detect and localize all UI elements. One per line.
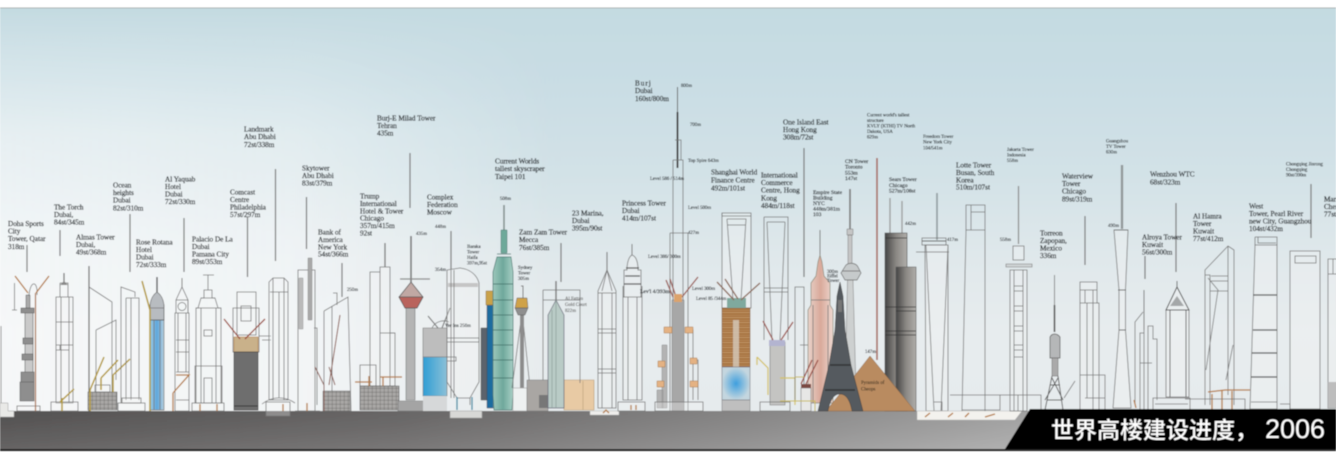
label: Landmark Abu Dhabi: 72st/338m — [244, 141, 275, 149]
tower: 23 Marina — [590, 252, 619, 415]
tower: International Commerce Centre — [757, 217, 795, 411]
label: Shanghai World Finance Centre: 492m/101st — [711, 184, 745, 192]
label: Bank of America: America — [318, 236, 344, 244]
tower: Sears Tower — [885, 198, 916, 411]
tower: Bank of America — [315, 293, 351, 411]
label: Burj-E Milad Tower: Burj-E Milad Tower — [377, 114, 436, 122]
tower: The Torch — [51, 273, 78, 411]
tower: Chongqing Jinrong — [1280, 251, 1320, 409]
label: KVLY TV mast: structure — [867, 119, 884, 124]
tower: Jakarta Tower — [1000, 186, 1041, 411]
label: Wenzhou WTC: 68st/323m — [1150, 178, 1181, 186]
label: One Island East: One Island East — [783, 118, 829, 126]
label: Burj-E Milad Tower: 435m — [377, 130, 394, 138]
label: Torreon: 336m — [1040, 252, 1057, 260]
label: Empire State Building: NYC — [813, 201, 825, 207]
label: Ocean Heights: Dubai — [113, 197, 131, 205]
label: Paris height note: 300m — [827, 270, 838, 275]
tower: Burj Dubai — [655, 87, 703, 411]
label: Rose Rotana Hotel: Dubai — [136, 254, 154, 262]
label: Comcast Centre: Philadelphia — [230, 204, 267, 212]
tower: Princess Tower — [618, 244, 645, 411]
tower: Skytower — [295, 258, 320, 411]
label: The Torch: 84st/345m — [54, 219, 85, 227]
tower: West Tower — [1250, 237, 1277, 409]
label: Rose Rotana Hotel: Rose Rotana — [136, 238, 173, 246]
label: CN Tower: CN Tower — [845, 159, 868, 165]
tower: Pyramid of Cheops — [826, 356, 915, 411]
label: The Torch: The Torch — [54, 204, 84, 212]
label: Zam Zam Tower: 76st/385m — [519, 244, 550, 252]
label: Trump International Hotel and Tower: 357m/415m — [360, 222, 395, 230]
label: 448m height: 448m — [435, 225, 446, 230]
label: Lotte Tower: Lotte Tower — [956, 162, 992, 170]
tower: Trump International — [355, 243, 402, 410]
label: Comcast Centre: 57st/297m — [230, 211, 261, 219]
label: Ocean Heights: heights — [113, 189, 134, 197]
label: Burj heights: Level 500m — [688, 206, 711, 211]
label: Sears Tower: Chicago — [889, 183, 908, 189]
tower: Al Yaquab — [173, 278, 189, 411]
label: Doha Sports City Tower: 318m — [8, 243, 25, 251]
label: Taipei 101: tallest skyscraper — [495, 165, 545, 173]
label: Burj heights: 427m — [688, 231, 699, 236]
label: Burj heights: Top Spire 643m — [688, 159, 719, 164]
label: Level 85 notation: Level 85 /344m — [696, 297, 727, 302]
label: Sydney Tower: Tower — [518, 272, 531, 276]
label: Doha Sports City Tower: Tower, Qatar — [8, 235, 46, 243]
label: One Island East: Hong Kong — [783, 126, 817, 134]
label: Sears Tower: 527m/108st — [889, 189, 916, 195]
label: Freedom Tower: 104/541m — [923, 146, 943, 151]
label: Comcast Centre: Centre — [230, 196, 249, 204]
label: Torreon: Mexico — [1040, 244, 1062, 252]
label: Almas Tower: Dubai, — [76, 241, 96, 249]
label: KVLY TV mast: Current world's tallest — [867, 114, 910, 118]
label: Trump International Hotel and Tower: International — [360, 200, 397, 208]
tower: Doha Sports City — [12, 276, 49, 411]
label: Wenzhou WTC: Wenzhou WTC — [1150, 170, 1195, 178]
label: Burj heights: Level 300m — [692, 287, 715, 292]
label: 23 Marina: 395m/90st — [572, 224, 602, 232]
tower: CN Tower — [841, 189, 861, 390]
label: Al Hamra Tower: Kuwait — [1193, 228, 1214, 236]
label: Palacio De La Dubai: Palacio De La — [192, 236, 234, 244]
label: Burj heights: Level 586 / 514m — [650, 177, 684, 182]
tower: Ocean Heights — [118, 287, 145, 411]
label: 23 Marina: 23 Marina, — [572, 210, 604, 218]
label: Skytower: Skytower — [302, 164, 330, 172]
label: International Commerce Centre: Centre, Hong — [761, 187, 800, 195]
label: Al Fattan Gold Court: 822m — [565, 309, 576, 314]
tower: Sydney Tower — [512, 286, 530, 411]
label: Princess Tower: 414m/107st — [622, 214, 656, 222]
label: Rose Rotana Hotel: 72st/333m — [136, 261, 167, 269]
label: West Tower: new City, Guangzhou — [1249, 218, 1312, 226]
label: Almas Tower: Almas Tower — [76, 234, 115, 242]
label: Almas Tower: 49st/368m — [76, 249, 107, 257]
label: Al Yaquab Hotel: 72st/330m — [165, 198, 196, 206]
label: Skytower: 83st/379m — [302, 180, 333, 188]
label: KVLY TV mast: 629m — [867, 136, 878, 140]
tower: Rose Rotana — [142, 277, 164, 411]
label: Trump International Hotel and Tower: Hotel & Tower — [360, 207, 404, 215]
label: Empire State Building: Building — [813, 196, 833, 202]
label: Level 4 notation: Lev'l 4/393m — [640, 289, 670, 295]
label: Lotte Tower: Busan, South — [956, 169, 995, 177]
label: Pyramids of Cheops: Cheops — [861, 388, 876, 392]
label: Complex Federation Moscow: Federation — [427, 201, 458, 209]
label: 442m height: 442m — [905, 222, 916, 227]
label: Sears Tower: Sears Tower — [889, 177, 917, 183]
label: Chongqing Jinrong: Chongqing Jinrong — [1286, 162, 1324, 168]
label: Sydney Tower: Sydney — [518, 266, 533, 271]
tower: Shanghai World Finance Centre — [717, 213, 760, 411]
label: Burj Dubai: Burj — [635, 80, 652, 88]
label: Baraka Tower: Tower — [467, 250, 480, 256]
label: Comcast Centre: Comcast — [230, 188, 255, 196]
title banner — [1005, 409, 1336, 449]
label: Landmark Abu Dhabi: Abu Dhabi — [244, 133, 276, 141]
tower: Federation Complex — [423, 231, 482, 418]
label: Alroya Tower: Alroya Tower — [1142, 234, 1182, 242]
label: International Commerce Centre: 484m/118st — [761, 202, 795, 210]
tower: Comcast Centre — [224, 292, 271, 410]
tower: Freedom Tower — [916, 193, 949, 411]
label: Bank of America: 54st/366m — [318, 251, 349, 259]
label: Trump International Hotel and Tower: 92st — [360, 230, 372, 238]
label: Guangzhou TV Tower: TV Tower — [1106, 145, 1126, 150]
label: Al Yaquab Hotel: Hotel — [165, 183, 181, 191]
label: West Tower: 104st/432m — [1249, 225, 1283, 233]
label: Bank of America: Bank of — [318, 228, 342, 236]
label: Skytower: Abu Dhabi — [302, 172, 334, 180]
label: 435m height: 435m — [416, 232, 427, 237]
label: The Torch: Dubai, — [54, 211, 74, 219]
label: Trump International Hotel and Tower: Trump — [360, 192, 380, 200]
label: Ocean Heights: Ocean — [113, 182, 132, 190]
label: Jakarta Tower: Indonesia — [1007, 154, 1027, 158]
label: Taipei 101: Current Worlds — [495, 158, 539, 166]
label: Baraka Tower: Baraka — [467, 245, 481, 250]
label: Paris height note: Eiffel — [827, 274, 838, 280]
label: CN Tower: 553m — [845, 170, 858, 176]
label: Chongqing Jinrong: 90st/390m — [1286, 174, 1307, 178]
label: Zam Zam Tower: Zam Zam Tower — [519, 228, 568, 236]
label: Shanghai World Finance Centre: Finance Centre — [711, 176, 755, 184]
label: Al Fattan Gold Court: Al Fattan — [565, 297, 584, 302]
label: Al Fattan Gold Court: Gold Court — [565, 303, 587, 308]
label: 558m height: 558m — [1000, 238, 1011, 243]
label: Burj heights: 800m — [681, 84, 692, 89]
label: Baraka Tower: Haifa — [467, 256, 479, 261]
label: Waterview Tower: Waterview — [1062, 172, 1094, 180]
base plaza: right white strip — [917, 411, 1022, 420]
tower: Almas — [88, 266, 130, 411]
tower: Milad Tower — [398, 236, 430, 411]
label: Bank of America: New York — [318, 243, 348, 251]
tower: right edge clipped — [1328, 259, 1336, 408]
label: Waterview Tower: 89st/319m — [1062, 195, 1093, 203]
label: Lotte Tower: Korea — [956, 176, 974, 184]
label: Palacio De La Dubai: Dubai — [192, 243, 210, 251]
label: CN Tower: Toronto — [845, 165, 863, 171]
leader lines — [27, 148, 1311, 297]
label: 508m height: 508m — [500, 197, 511, 202]
label: Burj Dubai: 160st/800m — [635, 95, 669, 103]
label: Torreon: Torreon — [1040, 230, 1063, 238]
label: Guangzhou TV Tower: 630m — [1106, 150, 1117, 156]
label: Alroya Tower: Kuwait — [1142, 241, 1163, 249]
label: Princess Tower: Dubai — [622, 207, 640, 215]
label: Al Yaquab Hotel: Al Yaquab — [165, 176, 196, 184]
label: Pyramids of Cheops: Pyramids of — [861, 381, 885, 386]
tower: low building and red cranes — [780, 360, 818, 411]
ground strip — [0, 411, 1336, 451]
tower: Landmark Abu Dhabi — [262, 278, 295, 416]
tower: One Island East — [795, 287, 810, 400]
label: Doha Sports City Tower: City — [8, 228, 21, 236]
label: Al Hamra Tower: Tower — [1193, 220, 1212, 228]
label: Trump International Hotel and Tower: Chicago — [360, 215, 384, 223]
label: Torreon: Zapopan, — [1040, 237, 1067, 245]
label: 23 Marina: Dubai — [572, 217, 590, 225]
label: Empire State Building: 448m/381m — [813, 206, 841, 212]
label: International Commerce Centre: International — [761, 172, 798, 180]
label: Paris height note: Tower — [827, 279, 840, 284]
tower: Al Hamra — [1185, 246, 1250, 411]
title: 世界高楼建设进度， — [1051, 417, 1258, 443]
label: Shanghai World Finance Centre: Shanghai World — [711, 168, 758, 176]
label: Alroya Tower: 56st/300m — [1142, 248, 1173, 256]
label: Empire State Building: Empire State — [813, 190, 843, 196]
tower: Alroya Tower — [1134, 290, 1157, 411]
tower: Waterview — [1080, 282, 1105, 411]
tower: Empire State Building — [808, 230, 833, 403]
label: International Commerce Centre: Commerce — [761, 179, 793, 187]
label: Landmark Abu Dhabi: Landmark — [244, 126, 274, 134]
label: Burj-E Milad Tower: Tehran — [377, 122, 397, 130]
tower: Lotte Tower — [950, 205, 1000, 411]
label: Doha Sports City Tower: Doha Sports — [8, 220, 44, 228]
label: 417m height: 417m — [947, 238, 958, 243]
label: West Tower: Tower, Pearl River — [1249, 210, 1304, 218]
label: Taipei 101: Taipei 101 — [495, 173, 526, 181]
label: Palacio De La Dubai: 89st/353m — [192, 258, 223, 266]
label: Freedom Tower: Freedom Tower — [923, 135, 954, 140]
label: Empire State Building: 103 — [813, 212, 822, 218]
tower: Palacio De La Dubai — [192, 275, 224, 411]
label: Princess Tower: Princess Tower — [622, 200, 666, 208]
tower: Dark blue neighbour — [481, 291, 503, 408]
tower: KVLY TV mast — [876, 158, 878, 360]
label: Federation lower height: Ver Ins 256m — [445, 324, 471, 329]
label: Complex Federation Moscow: Complex — [427, 194, 454, 202]
label: Palacio De La Dubai: Pamana City — [192, 250, 229, 258]
tower: left edge fragment — [0, 326, 14, 417]
label: Waterview Tower: Chicago — [1062, 188, 1086, 196]
label: Baraka Tower: 397m,95st — [467, 262, 488, 266]
label: Zam Zam Tower: Mecca — [519, 236, 539, 244]
label: 250m height: 250m — [347, 288, 358, 293]
label: International Commerce Centre: Kong — [761, 194, 777, 202]
label: KVLY TV mast: Dakota, USA — [867, 130, 893, 135]
label: Al Yaquab Hotel: Dubai — [165, 190, 183, 198]
label: Ocean Heights: 82st/310m — [113, 204, 144, 212]
label: Jakarta Tower: Jakarta Tower — [1007, 148, 1034, 153]
label: Waterview Tower: Tower — [1062, 180, 1081, 188]
tower: Eiffel Tower — [818, 282, 863, 411]
label: Jakarta Tower: 558m — [1007, 159, 1018, 164]
label: Complex Federation Moscow: Moscow — [427, 208, 453, 216]
tower: Torreon — [1045, 275, 1075, 410]
tower: Wenzhou WTC — [1153, 281, 1190, 411]
label: 147m height: 147m — [865, 350, 876, 355]
label: Burj Dubai: Dubai — [635, 87, 653, 95]
label: CN Tower: 147st — [845, 176, 858, 182]
label: West Tower: West — [1249, 202, 1263, 210]
label: Guangzhou TV Tower: Guangzhou — [1106, 140, 1129, 144]
label: KVLY TV mast: KVLY (KTHI) TV North — [867, 124, 916, 130]
title: 2006 — [1265, 414, 1325, 444]
tower: Guangzhou TV Tower — [1113, 165, 1131, 408]
tower: Zam Zam — [527, 281, 594, 411]
label: 490m height: 490m — [1108, 224, 1119, 229]
label: Al Hamra Tower: Al Hamra — [1193, 212, 1222, 220]
label: 354m height: 354m — [435, 268, 446, 273]
label: Burj heights: 700m — [690, 123, 701, 128]
tower: Taipei 101 — [493, 205, 513, 410]
label: One Island East: 308m/72st — [783, 134, 813, 142]
label: Rose Rotana Hotel: Hotel — [136, 246, 152, 254]
label: Lotte Tower: 510m/107st — [956, 184, 990, 192]
label: Chongqing Jinrong: Chongqing — [1286, 168, 1308, 173]
label: Burj heights: Level 386/ 300m — [648, 255, 681, 260]
label: Al Hamra Tower: 77st/412m — [1193, 235, 1224, 243]
label: Sydney Tower: 305m — [518, 277, 529, 282]
label: Freedom Tower: New York City — [923, 141, 953, 146]
